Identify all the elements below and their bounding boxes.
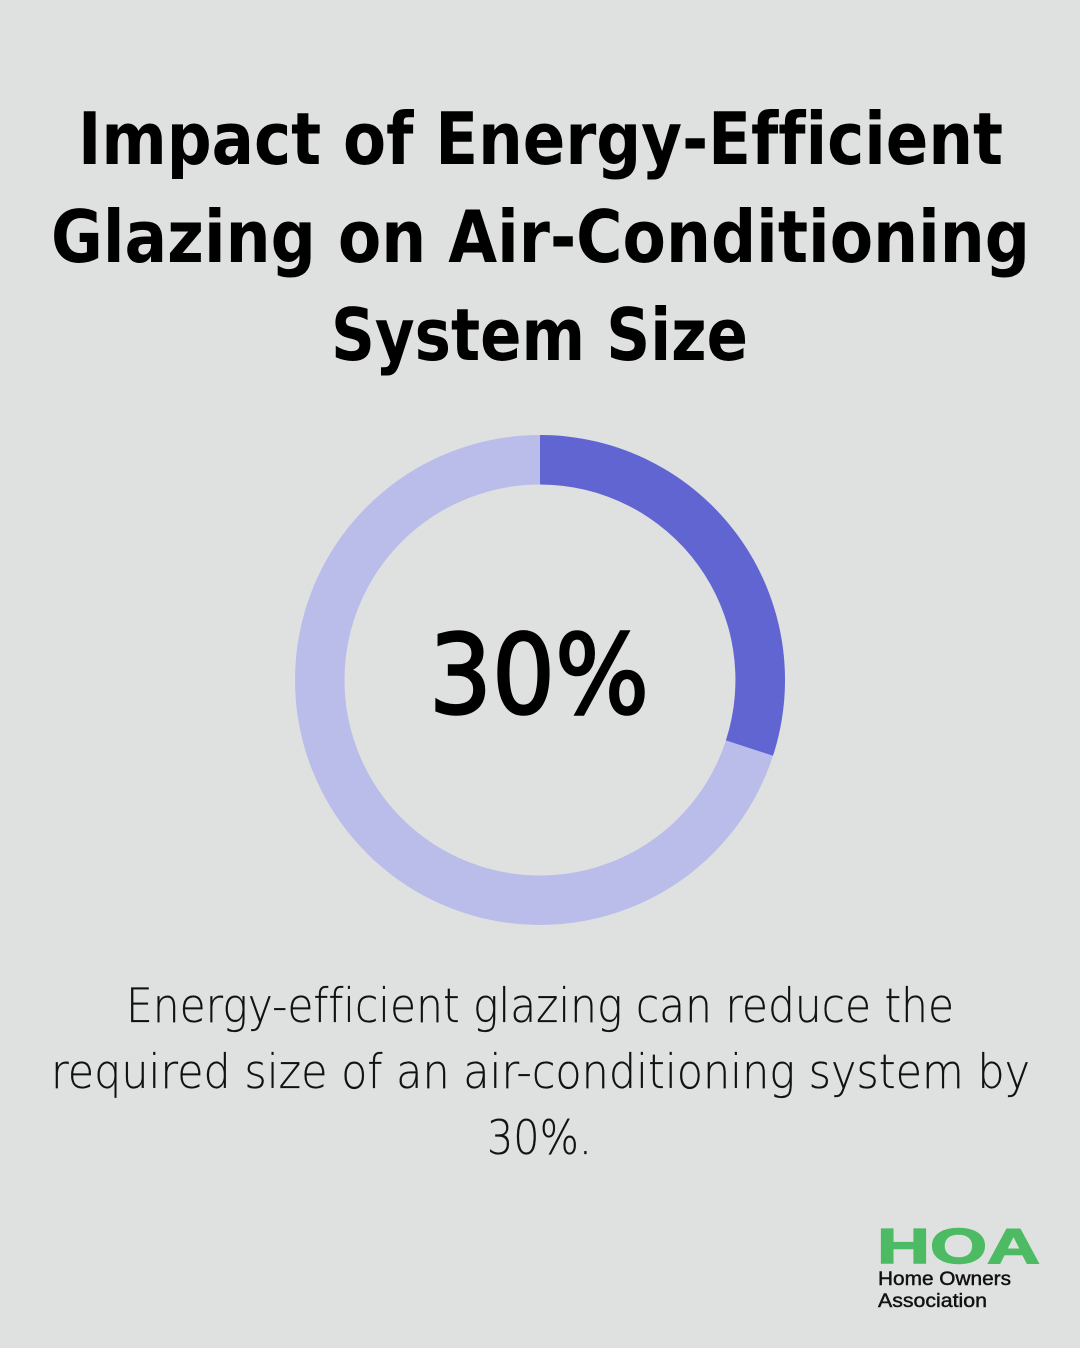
- description text: 30%.: [487, 1111, 592, 1166]
- title: [51, 97, 1030, 377]
- description text: [51, 979, 1030, 1166]
- donut value: 30%: [429, 611, 649, 739]
- logo: HOA Home Owners Association: Association: [878, 1290, 987, 1312]
- description text: Energy-efficient glazing can reduce the: [126, 979, 954, 1034]
- logo: HOA Home Owners Association: Home Owners: [878, 1268, 1011, 1290]
- donut chart: 30%: [320, 435, 785, 900]
- logo: HOA Home Owners Association: [877, 1220, 1040, 1312]
- title: System Size: [331, 293, 748, 377]
- logo: HOA Home Owners Association: HOA: [877, 1220, 1040, 1274]
